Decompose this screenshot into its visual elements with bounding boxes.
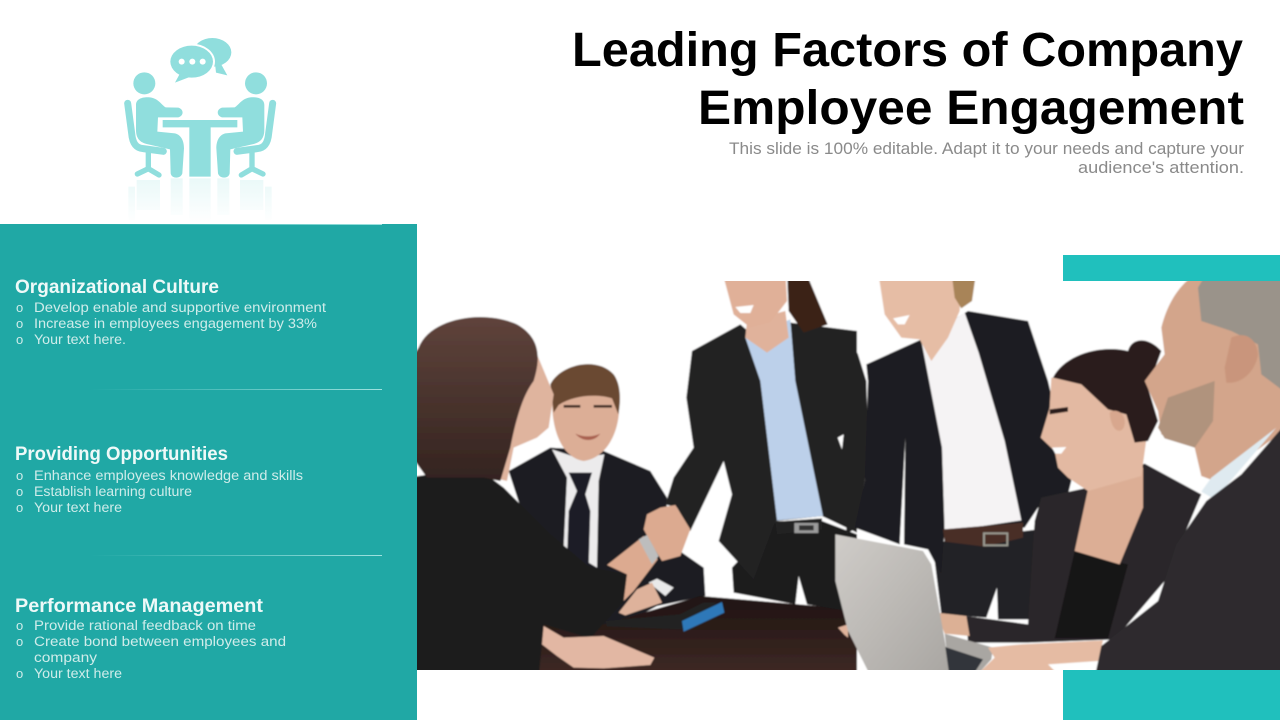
table (538, 595, 858, 670)
list: organizational culture: Increase in employees engagement by 33% (34, 316, 317, 331)
subtitle: This slide is 100% editable. Adapt it to your needs and capture your (729, 140, 1245, 158)
icon reflection (128, 178, 272, 222)
list: providing opportunities (16, 468, 303, 515)
list: organizational culture: Your text here. (34, 332, 126, 347)
list: performance management: o (16, 666, 23, 681)
left jacket continuation (846, 329, 868, 534)
seated man (509, 364, 705, 628)
panel: left teal sidebar (0, 224, 417, 720)
section: organizational culture (15, 277, 326, 347)
list: providing opportunities: o (16, 484, 23, 499)
title: Leading Factors of Company (572, 24, 1243, 77)
title: Employee Engagement (698, 82, 1244, 135)
right person (216, 72, 273, 178)
accent block: bottom right (1063, 670, 1280, 720)
section: providing opportunities (15, 444, 303, 515)
heading: providing opportunities: Providing Opportunities (15, 444, 228, 465)
standing woman in white shirt (855, 271, 1071, 619)
heading: organizational culture: Organizational Culture (15, 277, 219, 298)
icon: two people talking at a table (128, 38, 273, 222)
table (163, 120, 237, 177)
list: providing opportunities: o (16, 500, 23, 515)
photo: business team meeting (417, 281, 1280, 670)
speech bubbles (168, 38, 231, 83)
left half of photo (407, 271, 857, 678)
title (572, 24, 1244, 135)
list: performance management: Create bond between employees and (34, 634, 286, 649)
list: performance management: Provide rational feedback on time (34, 618, 256, 633)
hand on laptop (980, 639, 1104, 670)
left woman (407, 317, 659, 678)
folder (605, 602, 724, 632)
list: organizational culture: o (16, 332, 23, 347)
list: providing opportunities: o (16, 468, 23, 483)
laptop (835, 534, 993, 678)
subtitle: audience's attention. (1078, 159, 1244, 177)
list: organizational culture: o (16, 300, 23, 315)
list: providing opportunities: Enhance employees knowledge and skills (34, 468, 303, 483)
handshake (644, 505, 690, 561)
list: performance management (16, 618, 286, 681)
accent block: top right (1063, 255, 1280, 281)
heading: performance management: Performance Management (15, 596, 264, 617)
list: organizational culture: o (16, 316, 23, 331)
list: performance management: o (16, 634, 23, 649)
list: performance management: company (34, 650, 97, 665)
list: providing opportunities: Your text here (34, 500, 122, 515)
subtitle (729, 140, 1245, 177)
list: organizational culture: Develop enable and supportive environment (34, 300, 326, 315)
section: performance management (15, 596, 286, 681)
list: providing opportunities: Establish learning culture (34, 484, 192, 499)
woman hand on table (838, 624, 848, 638)
left person (128, 72, 184, 178)
grey-haired man (1095, 271, 1280, 678)
list: performance management: Your text here (34, 666, 122, 681)
list: organizational culture (16, 300, 326, 347)
list: performance management: o (16, 618, 23, 633)
standing woman in blue shirt (665, 271, 857, 613)
right half of photo (835, 271, 1280, 678)
woman with hair bun (966, 340, 1201, 643)
